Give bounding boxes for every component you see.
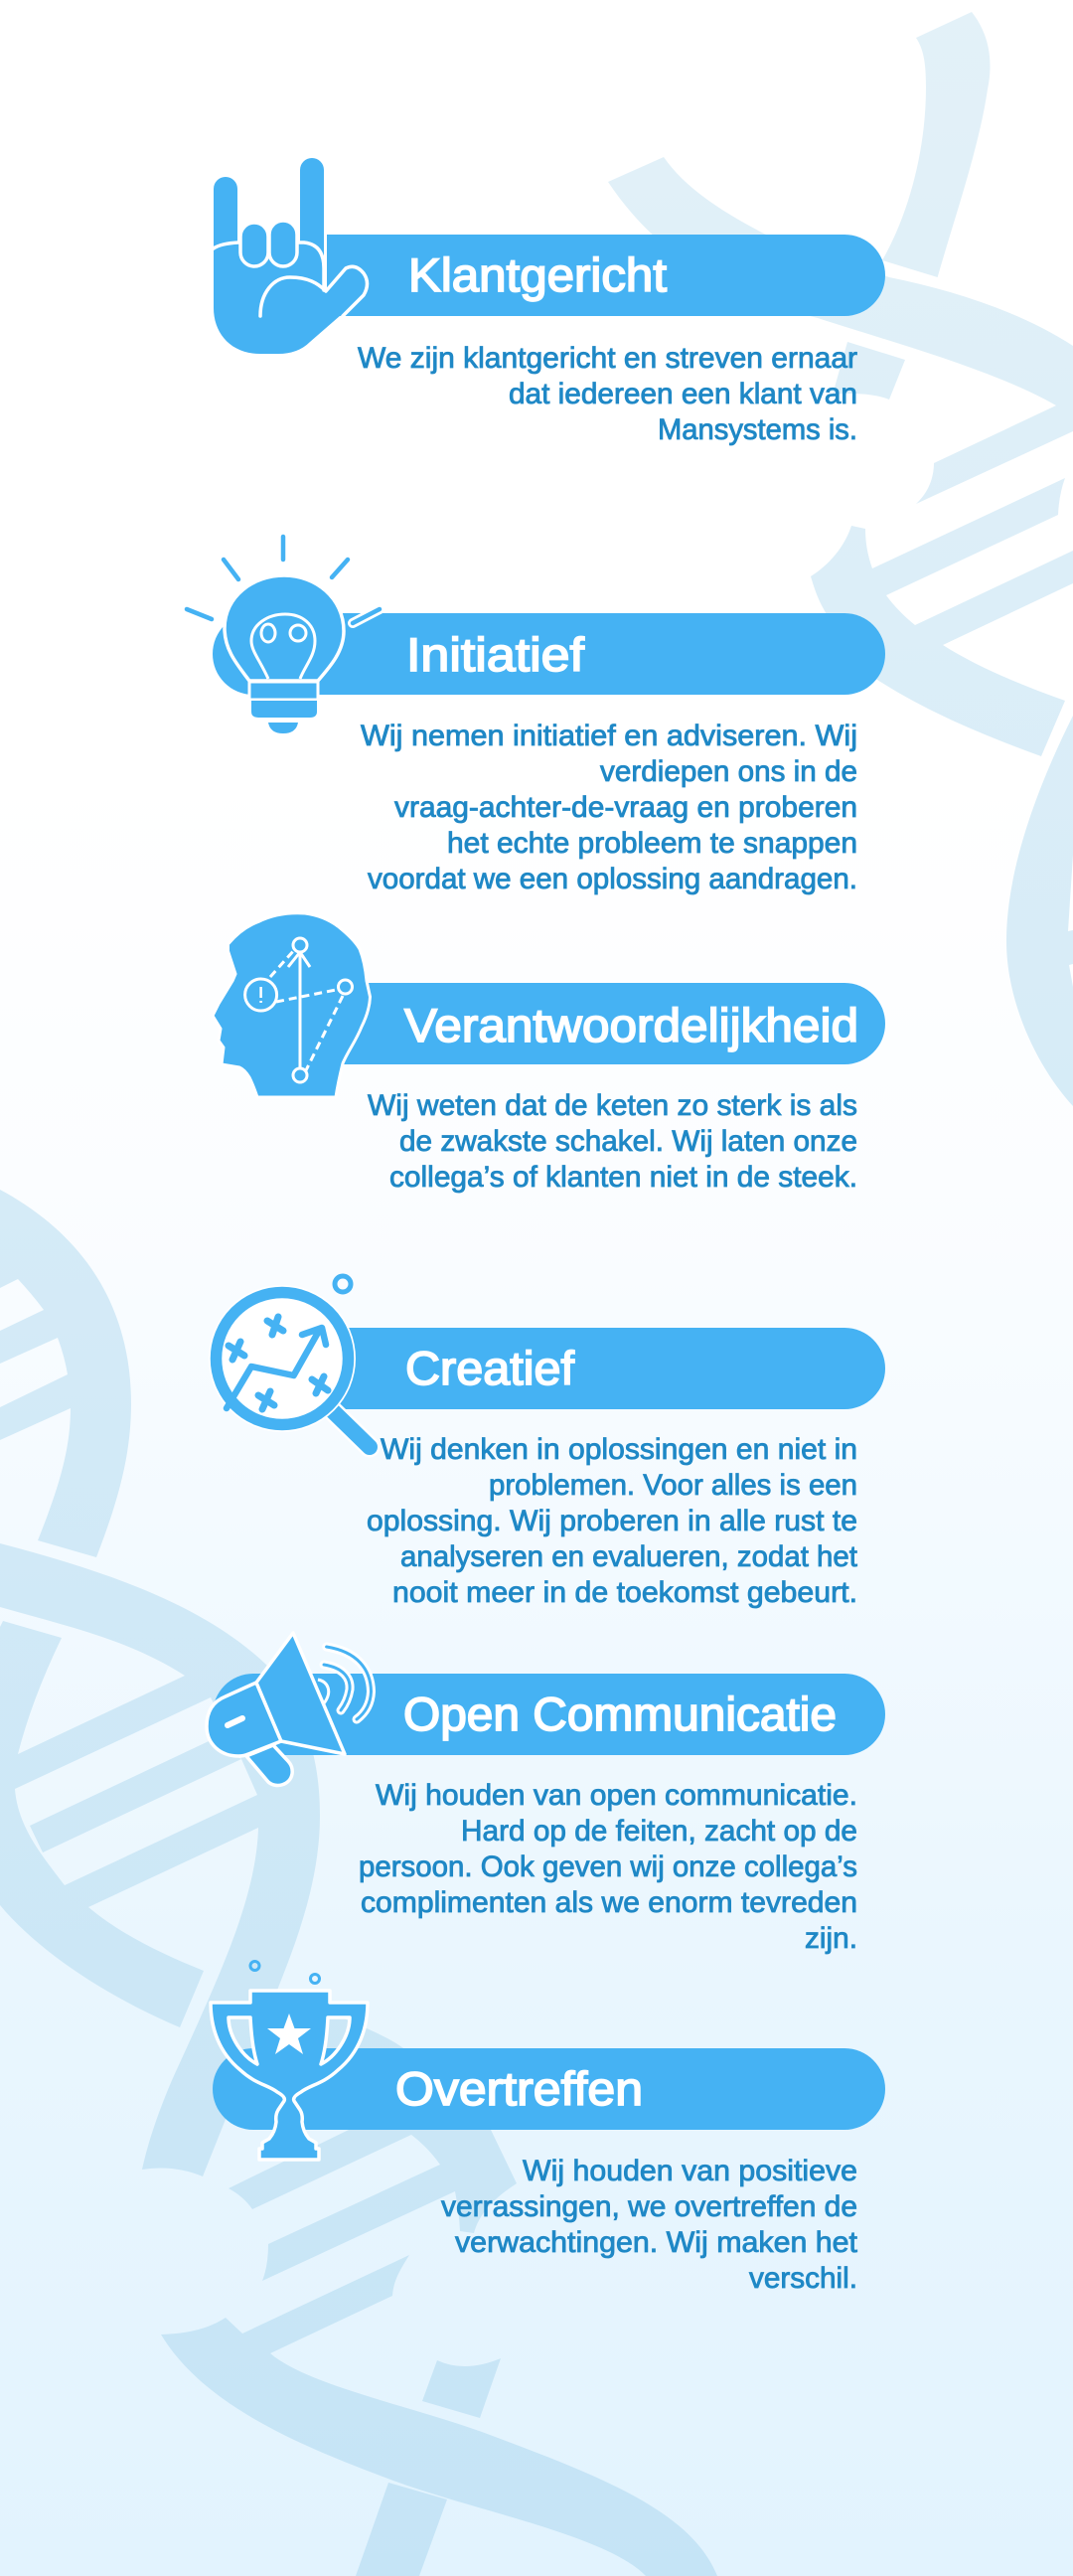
body text: We zijn klantgericht en streven ernaar <box>358 342 857 375</box>
body text: verrassingen, we overtreffen de <box>441 2190 857 2223</box>
body text <box>367 1433 858 1609</box>
body text: Mansystems is. <box>658 413 857 446</box>
body text: het echte probleem te snappen <box>447 827 857 860</box>
icon: trophy <box>211 1962 368 2160</box>
panel: Creatief <box>209 1276 885 1609</box>
panel: Klantgericht <box>214 158 885 446</box>
body text: nooit meer in de toekomst gebeurt. <box>392 1576 857 1609</box>
body text: Wij denken in oplossingen en niet in <box>381 1433 857 1466</box>
body text: verschil. <box>749 2262 857 2295</box>
icon: head with nodes <box>213 913 370 1097</box>
body text: dat iedereen een klant van <box>509 378 857 410</box>
body text: Wij weten dat de keten zo sterk is als <box>368 1089 857 1122</box>
icon: megaphone <box>207 1633 372 1785</box>
body text: de zwakste schakel. Wij laten onze <box>399 1125 857 1158</box>
body text: analyseren en evalueren, zodat het <box>400 1540 858 1573</box>
heading: Overtreffen: Overtreffen <box>395 2062 643 2115</box>
heading bar <box>213 613 885 695</box>
heading bar <box>338 1328 885 1409</box>
icon: light bulb <box>187 537 380 733</box>
body text: verwachtingen. Wij maken het <box>455 2226 858 2259</box>
body text: oplossing. Wij proberen in alle rust te <box>367 1505 857 1537</box>
heading: Verantwoordelijkheid: Verantwoordelijkheid <box>404 999 858 1051</box>
heading: Initiatief: Initiatief <box>406 628 585 681</box>
heading bar <box>213 2048 885 2130</box>
body text: zijn. <box>805 1922 857 1955</box>
body text: problemen. Voor alles is een <box>489 1469 857 1502</box>
panel: Open Communicatie <box>207 1633 885 1955</box>
panel: Overtreffen <box>211 1962 885 2295</box>
body text: Wij houden van positieve <box>523 2155 857 2187</box>
body text: verdiepen ons in de <box>600 755 857 788</box>
heading bar <box>327 235 885 316</box>
body text: Wij nemen initiatief en adviseren. Wij <box>361 720 857 752</box>
body text: complimenten als we enorm tevreden <box>361 1886 857 1919</box>
icon: rock hand <box>214 158 368 354</box>
body text <box>358 342 857 446</box>
heading bar <box>213 1674 885 1755</box>
panel: Initiatief <box>187 537 885 895</box>
body text <box>361 720 857 895</box>
body text <box>441 2155 858 2295</box>
heading: Creatief: Creatief <box>405 1342 575 1394</box>
heading: Klantgericht: Klantgericht <box>408 248 667 301</box>
icon: magnifier with chart <box>209 1276 370 1447</box>
heading: Open Communicatie: Open Communicatie <box>403 1688 837 1740</box>
body text: Wij houden van open communicatie. <box>376 1779 857 1812</box>
body text: collega’s of klanten niet in de steek. <box>389 1161 857 1194</box>
panel: Verantwoordelijkheid <box>213 913 885 1194</box>
body text: vraag-achter-de-vraag en proberen <box>394 791 857 824</box>
body text: voordat we een oplossing aandragen. <box>368 863 857 895</box>
body text <box>368 1089 857 1194</box>
heading bar <box>338 983 885 1064</box>
body text <box>359 1779 857 1955</box>
body text: persoon. Ook geven wij onze collega’s <box>359 1851 857 1883</box>
body text: Hard op de feiten, zacht op de <box>461 1815 857 1848</box>
